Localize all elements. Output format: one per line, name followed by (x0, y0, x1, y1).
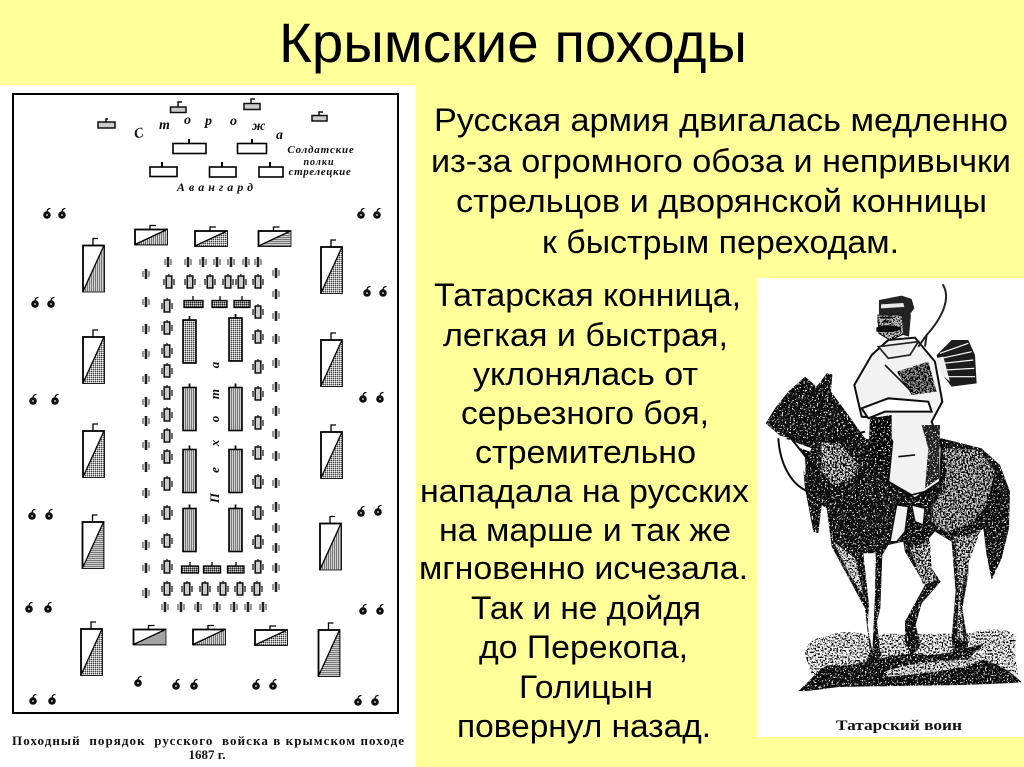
vanguard outposts (98, 99, 327, 128)
diagram caption: 1687 г. (189, 747, 225, 762)
ground (798, 629, 1022, 691)
horse body (766, 373, 1010, 672)
label: pekhota vertical: т (207, 389, 222, 399)
label: storozha arc: т (159, 118, 170, 133)
diagram drawing (13, 94, 398, 713)
text: slow army paragraph: из-за огромного обоза и непривычки (431, 143, 1011, 179)
label: pekhota vertical: П (207, 492, 222, 504)
label: pekhota vertical: е (207, 467, 222, 473)
text: tatar cavalry paragraph: стремительно (475, 434, 696, 470)
diagram caption (12, 733, 404, 762)
label: storozha arc: а (276, 128, 283, 143)
text: tatar cavalry paragraph: серьезного боя, (461, 395, 709, 431)
text: tatar cavalry paragraph: Так и не дойдя (471, 590, 701, 626)
central infantry columns (183, 314, 242, 552)
text: tatar cavalry paragraph: уклонялась от (473, 356, 698, 392)
label: pekhota vertical: а (207, 361, 222, 368)
text: tatar cavalry paragraph: на марше и так же (439, 512, 731, 548)
side regiments (81, 238, 342, 676)
label: pekhota vertical: х (207, 439, 222, 447)
bow (918, 284, 946, 347)
label: regiments: Солдатские (287, 144, 355, 156)
head and hat (876, 296, 914, 340)
text: tatar cavalry paragraph: повернул назад. (457, 708, 711, 744)
bridle (778, 432, 865, 492)
text: tatar cavalry paragraph: Голицын (519, 669, 653, 705)
medium units (162, 274, 263, 595)
diagram caption: Походный порядок русского войска в крымском походе (12, 733, 404, 748)
text: slow army paragraph (431, 102, 1011, 260)
label: pekhota vertical (207, 361, 222, 504)
saddle and boot (890, 505, 925, 542)
text: tatar cavalry paragraph: Татарская конница, (434, 277, 741, 313)
small horizontal units (182, 296, 250, 573)
label: storozha arc: о (230, 114, 237, 129)
front and rear regiments (134, 226, 290, 645)
label: regiments: стрелецкие (289, 166, 351, 178)
text: slow army paragraph: Русская армия двигалась медленно (434, 102, 1008, 138)
label: storozha arc: р (204, 114, 212, 129)
warrior caption: Татарский воин (836, 718, 962, 734)
label: storozha arc: ж (252, 119, 266, 134)
label: storozha arc (133, 113, 283, 143)
text: tatar cavalry paragraph: легкая и быстрая, (443, 317, 728, 353)
label: avangard: Авангард (176, 180, 257, 194)
label: storozha arc: о (184, 113, 191, 128)
diagram frame (13, 94, 398, 713)
title: Крымские походы (279, 11, 747, 74)
label: storozha arc: С (133, 125, 146, 142)
illustration: horse and rider (766, 284, 1022, 691)
tiny units (143, 257, 279, 612)
text: tatar cavalry paragraph: до Перекопа, (479, 629, 688, 665)
label: regiments: полки (303, 157, 335, 168)
vanguard regiments (150, 139, 283, 177)
artillery pairs (25, 208, 387, 706)
rider (854, 338, 942, 542)
text: slow army paragraph: к быстрым переходам. (542, 224, 899, 260)
text: slow army paragraph: стрельцов и дворянской конницы (456, 183, 987, 219)
horse shading (932, 448, 995, 532)
text: tatar cavalry paragraph: мгновенно исчезала. (419, 550, 748, 586)
panel: march order diagram (0, 85, 416, 767)
arrow quiver (935, 340, 977, 387)
panel: tatar warrior illustration (757, 278, 1024, 737)
text: tatar cavalry paragraph: нападала на русских (420, 473, 749, 509)
text: tatar cavalry paragraph (419, 277, 749, 744)
label: pekhota vertical: о (207, 415, 222, 422)
label: regiments (287, 144, 355, 178)
